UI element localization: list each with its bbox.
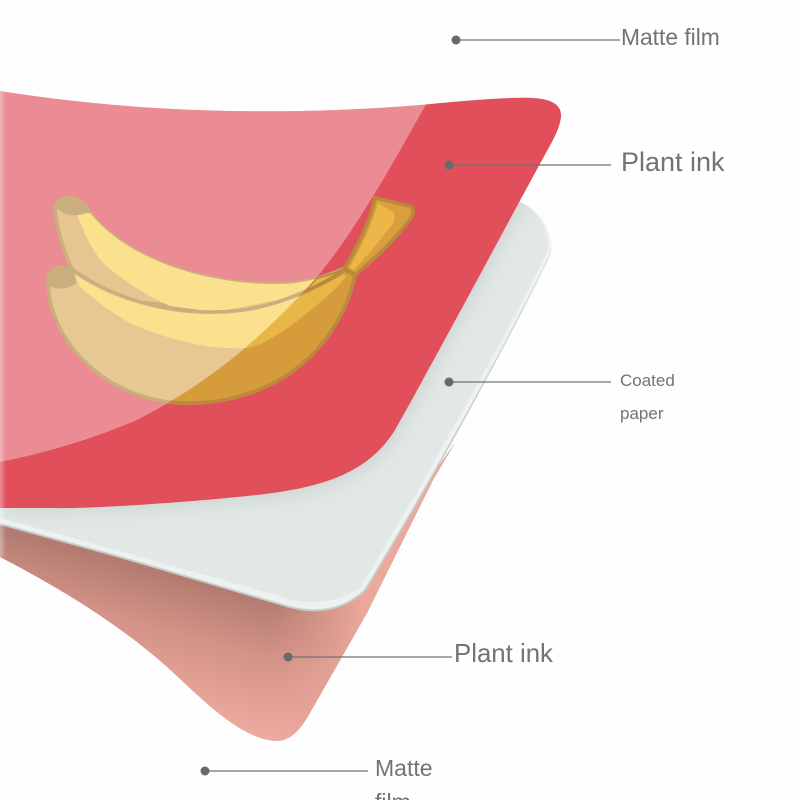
red plant ink layer: [0, 91, 561, 508]
layered sheet illustration: [0, 36, 620, 776]
label: coated paper: Coated: [620, 371, 675, 390]
matte film overlay: [0, 91, 426, 462]
label: matte film bottom: Matte: [375, 755, 433, 781]
label: matte film bottom: [375, 755, 433, 800]
bottom plant ink layer: [0, 443, 455, 741]
leader dots: [200, 36, 460, 776]
leader lines: [205, 40, 620, 771]
label: coated paper: [620, 371, 675, 423]
banana outside matte film: [167, 196, 415, 405]
label: matte film top: Matte film: [621, 24, 720, 50]
label: coated paper: paper: [620, 404, 663, 423]
label: plant ink top: Plant ink: [621, 147, 725, 177]
banana under matte film: [48, 198, 413, 403]
pale left edge: [0, 91, 6, 557]
label: plant ink bottom: Plant ink: [454, 640, 553, 668]
coated paper layer: [0, 202, 552, 612]
